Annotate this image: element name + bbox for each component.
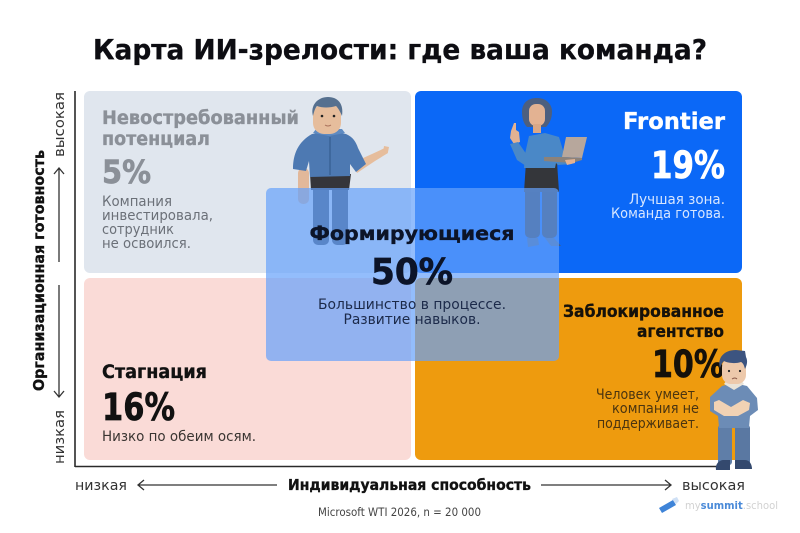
text: frontier: Frontier — [623, 107, 725, 135]
arrow: readiness up — [54, 168, 64, 262]
text: unclaimed potential: потенциал — [102, 129, 210, 150]
text: blocked agency: 10% — [652, 343, 724, 386]
label: low ability: низкая — [75, 478, 127, 494]
text: stagnation: 16% — [102, 386, 175, 429]
text: frontier — [611, 107, 725, 222]
text: forming: Формирующиеся — [310, 222, 514, 245]
text: forming: 50% — [371, 252, 453, 293]
panel: frontier — [415, 91, 742, 273]
label: high ability: высокая — [682, 478, 745, 494]
icon: man with crossed arms — [710, 350, 758, 470]
panel: blocked agency — [415, 278, 742, 460]
panel: forming (translucent center) — [266, 188, 559, 361]
source note: Microsoft WTI 2026, n = 20 000 — [318, 505, 481, 519]
icon: man in blue shirt pointing — [293, 97, 389, 245]
vertical axis — [74, 91, 76, 467]
icon: spyglass logo — [659, 497, 679, 513]
text: unclaimed potential: сотрудник — [102, 222, 174, 238]
text: stagnation — [102, 362, 256, 445]
horizontal axis title: Индивидуальная способность — [288, 476, 531, 494]
icon: woman with laptop — [510, 98, 587, 247]
panel: unclaimed potential — [84, 91, 411, 273]
label: low readiness: низкая — [52, 410, 68, 464]
text: blocked agency: Заблокированное — [563, 302, 724, 322]
title: Карта ИИ-зрелости: где ваша команда? — [93, 33, 707, 66]
text: blocked agency: Человек умеет, — [596, 387, 699, 403]
text: blocked agency — [563, 302, 724, 432]
text: stagnation: Стагнация — [102, 362, 207, 383]
text: blocked agency: компания не — [612, 401, 699, 417]
text: frontier: Лучшая зона. — [629, 192, 725, 208]
text: forming — [310, 222, 514, 328]
text: unclaimed potential: Компания — [102, 194, 172, 210]
text: unclaimed potential — [102, 108, 299, 252]
text: blocked agency: агентство — [637, 322, 724, 342]
label: high readiness: высокая — [52, 92, 68, 157]
arrow: ability right — [541, 480, 671, 490]
text: frontier: 19% — [651, 144, 725, 187]
arrow: ability left — [138, 480, 277, 490]
text: frontier: Команда готова. — [611, 206, 725, 222]
panel: low readiness, low ability — [84, 278, 411, 460]
text: blocked agency: поддерживает. — [597, 416, 699, 432]
text: stagnation: Низко по обеим осям. — [102, 429, 256, 445]
text: unclaimed potential: инвестировала, — [102, 208, 213, 224]
horizontal axis — [75, 466, 720, 468]
text: unclaimed potential: не освоился. — [102, 236, 191, 252]
text: unclaimed potential: 5% — [102, 153, 151, 191]
logo text: mysummit.school — [685, 500, 778, 512]
text: forming: Развитие навыков. — [344, 312, 480, 328]
vertical axis title: Организационная готовность — [30, 150, 48, 391]
text: unclaimed potential: Невостребованный — [102, 108, 299, 129]
text: forming: Большинство в процессе. — [318, 297, 506, 313]
arrow: readiness down — [54, 285, 64, 397]
